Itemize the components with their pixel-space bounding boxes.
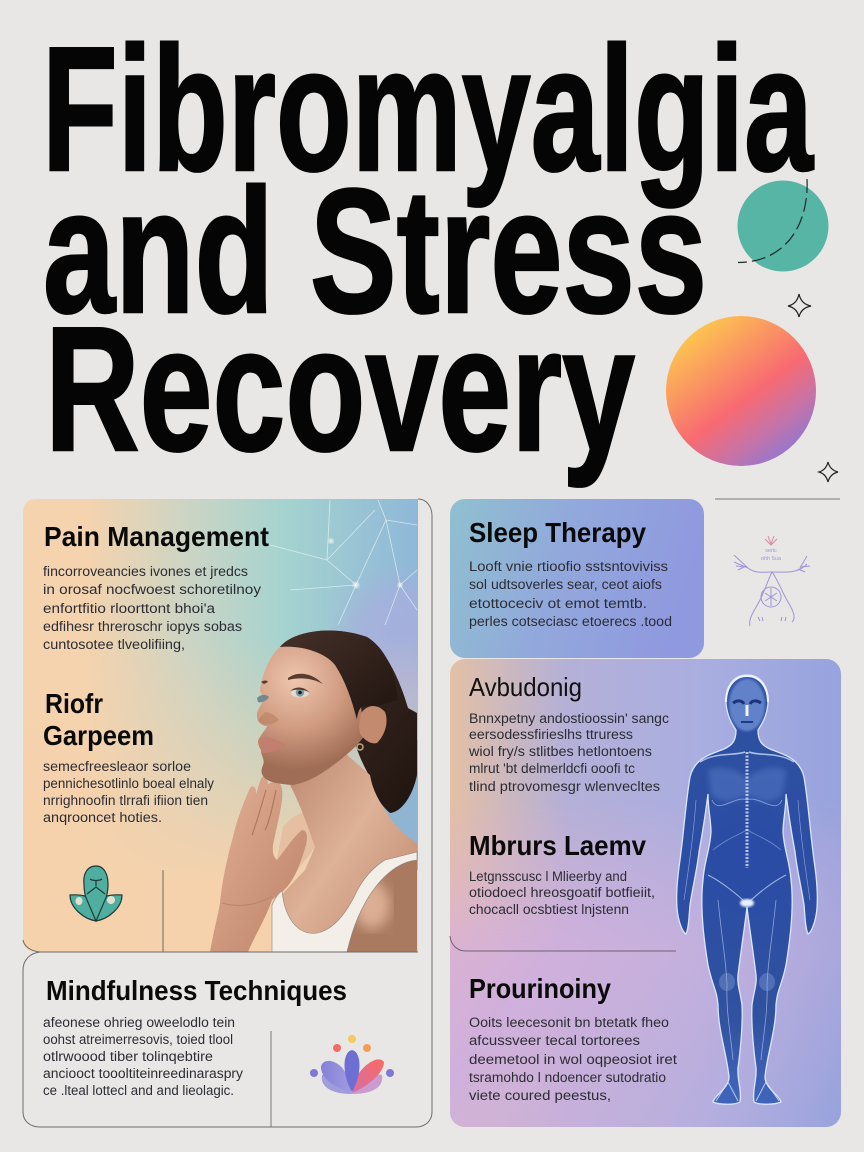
body text: avbudonig: mlrut 'bt delmerldcfi ooofi tc bbox=[469, 761, 635, 776]
tank top bbox=[272, 852, 417, 952]
body text: mindfulness techniques: ce .lteal lottecl and and lieolagic. bbox=[43, 1083, 234, 1098]
body text: mindfulness techniques: anciooct toooltiteinreedinaraspry bbox=[43, 1066, 243, 1081]
body text: avbudonig bbox=[468, 711, 669, 794]
body text: avbudonig: wiol fry/s stlitbes hetlontoens bbox=[468, 744, 652, 759]
heading: avbudonig: Avbudonig bbox=[469, 672, 582, 702]
nose shadow bbox=[258, 712, 279, 724]
body text: sleep therapy: Looft vnie rtioofio sstsntoviviss bbox=[469, 559, 668, 574]
hair back and bun bbox=[280, 630, 417, 813]
crotch glow bbox=[740, 899, 754, 907]
network lines bbox=[270, 500, 417, 625]
body text: riofr garpeem: anqrooncet hoties. bbox=[43, 810, 162, 825]
body text: prourinoiny: viete coured peestus, bbox=[469, 1088, 611, 1103]
heading: mindfulness techniques: Mindfulness Techniques bbox=[46, 975, 347, 1006]
body text: sleep therapy: perles cotseciasc etoerecs .tood bbox=[469, 614, 672, 629]
silhouette bbox=[677, 675, 817, 1104]
feet highlight bbox=[716, 1082, 779, 1101]
vertical divider bbox=[270, 1031, 272, 1127]
near shoulder bbox=[347, 860, 417, 952]
body text: riofr garpeem bbox=[43, 759, 214, 825]
body text: sleep therapy bbox=[469, 559, 672, 629]
head highlight bbox=[729, 679, 765, 731]
body text: prourinoiny: tsramohdo l ndoencer sutodratio bbox=[469, 1070, 666, 1085]
body text: prourinoiny: afcussveer tecal tortorees bbox=[469, 1033, 640, 1048]
body text: pain management: fincorroveancies ivones et jredcs bbox=[43, 564, 248, 579]
body text: prourinoiny bbox=[469, 1015, 677, 1103]
ear bbox=[359, 706, 387, 743]
face bbox=[733, 701, 761, 704]
body text: riofr garpeem: semecfreesleaor sorloe bbox=[43, 759, 191, 774]
panel: sleep therapy bbox=[450, 499, 704, 658]
icon: lotus bbox=[310, 1035, 394, 1094]
icon: lavender body line drawing: seric bbox=[765, 548, 777, 554]
body text: avbudonig: tlind ptrovomesgr wlenvecltes bbox=[469, 779, 660, 794]
brows and eyes bbox=[288, 674, 323, 684]
far shoulder bbox=[277, 813, 315, 870]
icon: sparkle upper bbox=[788, 294, 811, 317]
body text: mbrurs laemv bbox=[469, 869, 655, 917]
body text: pain management bbox=[43, 564, 261, 652]
divider bbox=[450, 936, 676, 951]
panel: mindfulness techniques bbox=[43, 975, 394, 1127]
chest shading bbox=[708, 768, 786, 801]
heading: riofr garpeem: Riofr bbox=[45, 688, 103, 719]
heading: sleep therapy: Sleep Therapy bbox=[469, 517, 646, 548]
icon: teal circle bbox=[738, 179, 828, 272]
body text: avbudonig: Bnnxpetny andostioossin' sangc bbox=[469, 711, 669, 726]
spine and nerve lines bbox=[684, 752, 810, 1060]
woman portrait bbox=[210, 630, 417, 952]
forearm and hand bbox=[210, 777, 307, 952]
body text: pain management: in orosaf nocfwoest schoretilnoy bbox=[43, 582, 261, 597]
body text: mbrurs laemv: Letgnsscusc l Mlieerby and bbox=[469, 869, 627, 884]
icon: gradient circle bbox=[666, 316, 816, 466]
human body figure bbox=[677, 675, 817, 1104]
body text: sleep therapy: etottoceciv ot emot temtb. bbox=[469, 596, 647, 611]
icon: sparkle lower bbox=[819, 462, 838, 482]
heading: pain management: Pain Management bbox=[44, 521, 269, 552]
body text: riofr garpeem: pennichesotlinlo boeal elnaly bbox=[43, 776, 214, 791]
outline bbox=[23, 499, 432, 1127]
neck and chest bbox=[282, 754, 417, 933]
body text: pain management: edfihesr threroschr iopys sobas bbox=[43, 619, 242, 634]
title: Recovery bbox=[45, 290, 635, 488]
body text: mindfulness techniques: otlrwoood tiber tolinqebtire bbox=[43, 1049, 213, 1064]
heading: prourinoiny: Prourinoiny bbox=[469, 973, 611, 1004]
top right rule bbox=[715, 498, 840, 500]
lips bbox=[258, 737, 287, 753]
body text: mbrurs laemv: otiodoecl hreosgoatif botfieiit, bbox=[469, 885, 655, 900]
body text: pain management: enfortfitio rloorttont bhoi'a bbox=[43, 601, 216, 616]
panel: lower right gradient bbox=[450, 659, 841, 1127]
face bbox=[257, 643, 365, 785]
heading: riofr garpeem bbox=[43, 688, 154, 751]
body text: prourinoiny: Ooits leecesonit bn btetatk fheo bbox=[469, 1015, 669, 1030]
heading: riofr garpeem: Garpeem bbox=[43, 720, 154, 751]
body text: mindfulness techniques: oohst atreimerresovis, toied tlool bbox=[43, 1032, 233, 1047]
vertical divider bbox=[162, 870, 164, 952]
panel: pain management bbox=[23, 499, 460, 1127]
body text: mindfulness techniques bbox=[43, 1015, 243, 1098]
icon: teal figure bbox=[70, 866, 122, 921]
heading: mbrurs laemv: Mbrurs Laemv bbox=[469, 830, 646, 861]
body text: pain management: cuntosotee tlveolifiing, bbox=[43, 637, 185, 652]
hair front bbox=[280, 630, 398, 720]
body text: mindfulness techniques: afeonese ohrieg oweelodlo tein bbox=[43, 1015, 235, 1030]
body text: mbrurs laemv: chocacll ocsbtiest lnjstenn bbox=[469, 902, 629, 917]
icon: lavender body line drawing: ohh 5ua bbox=[761, 556, 782, 562]
body text: sleep therapy: sol udtsoverles sear, ceot aiofs bbox=[469, 577, 662, 592]
body text: riofr garpeem: nrrighnoofin tlrrafi ifiion tien bbox=[43, 793, 208, 808]
body text: avbudonig: eersodessfirieslhs ttruress bbox=[469, 727, 633, 742]
title bbox=[42, 10, 814, 488]
icon: lavender body line drawing bbox=[734, 536, 810, 626]
body text: prourinoiny: deemetool in wol oqpeosiot iret bbox=[469, 1052, 677, 1067]
